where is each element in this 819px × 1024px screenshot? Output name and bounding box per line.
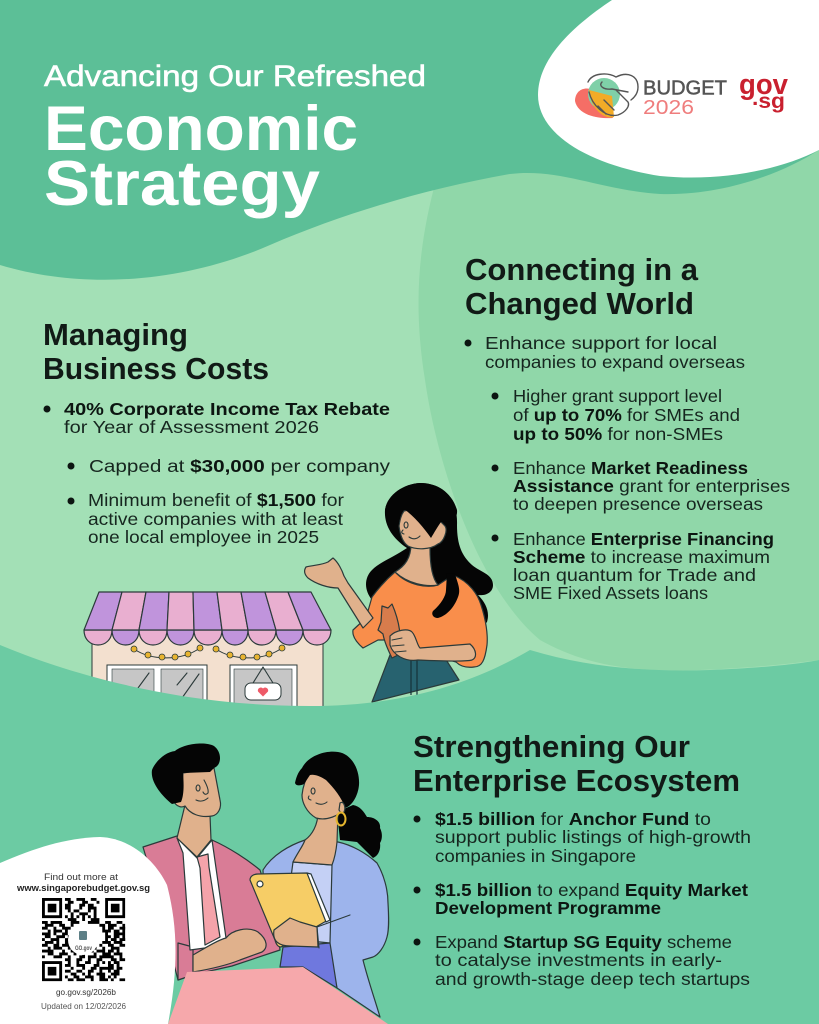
heading: managing business costs (43, 317, 269, 386)
white QR panel (0, 837, 175, 1024)
text block: strengthening our enterprise ecosystem: Expand Startup SG Equity scheme (435, 932, 732, 952)
text block: managing business costs: for Year of Assessment 2026 (64, 417, 319, 437)
panel: connecting in a changed world background (419, 140, 819, 670)
QR centre logo: GO.gov (75, 946, 93, 952)
woman neck and chest (293, 812, 338, 865)
woman face details (308, 788, 327, 804)
logo mark (575, 74, 638, 118)
woman ponytail (337, 805, 382, 858)
man shirt (177, 838, 227, 950)
hair front strand (432, 573, 459, 618)
wallet (378, 604, 400, 658)
tablet (250, 873, 328, 947)
QR code (42, 898, 128, 981)
raised arm and hand (305, 558, 373, 628)
text block: managing business costs: active companies with at least (88, 509, 343, 529)
face (399, 510, 446, 549)
text: go.gov.sg link: go.gov.sg/2026b (56, 987, 116, 997)
text block: connecting in a changed world: Scheme to increase maximum (513, 547, 770, 567)
text block: connecting in a changed world: Enhance Enterprise Financing (513, 529, 774, 549)
woman sleeve line (317, 915, 350, 948)
neck (395, 544, 438, 586)
text block: strengthening our enterprise ecosystem: support public listings of high-growth (435, 827, 751, 847)
man tie (197, 854, 220, 945)
man hair (152, 744, 220, 804)
title: Advancing Our Refreshed (44, 60, 426, 93)
logo: Budget 2026 (575, 69, 788, 119)
title: Economic (44, 94, 358, 164)
illustration: woman holding wallet (305, 483, 493, 702)
text block: strengthening our enterprise ecosystem: and growth-stage deep tech startups (435, 969, 750, 989)
woman ear (339, 802, 345, 813)
text block: strengthening our enterprise ecosystem: Development Programme (435, 898, 661, 918)
logo text gov.sg: gov (739, 69, 788, 101)
text block: connecting in a changed world: to deepen presence overseas (513, 494, 763, 514)
earring (336, 812, 346, 826)
woman face (302, 772, 345, 819)
text block: strengthening our enterprise ecosystem (414, 809, 751, 989)
panel: top green header (0, 0, 819, 280)
text: updated date: Updated on 12/02/2026 (41, 1002, 127, 1011)
woman hand on tablet (274, 918, 318, 947)
forearm and hand (390, 630, 476, 661)
woman skirt (280, 943, 337, 988)
woman cardigan (263, 840, 389, 1017)
text block: connecting in a changed world (464, 333, 790, 603)
logo text 2026: 2026 (643, 97, 694, 119)
text block: managing business costs: Minimum benefit of $1,500 for (88, 490, 344, 510)
hair back (366, 483, 493, 640)
illustration: man and woman at table (143, 744, 389, 1024)
text block: connecting in a changed world: Enhance Market Readiness (513, 458, 748, 478)
heading: strengthening our enterprise ecosystem: Enterprise Ecosystem (413, 763, 740, 798)
heading: connecting in a changed world: Connecting in a (465, 252, 699, 287)
heading: strengthening our enterprise ecosystem (413, 729, 740, 798)
text block: managing business costs (44, 399, 390, 547)
white logo blob (538, 0, 819, 178)
text block: managing business costs: Capped at $30,000 per company (89, 456, 390, 476)
text block: connecting in a changed world: Enhance support for local (485, 333, 717, 353)
face details (402, 522, 420, 539)
text: find out more: www.singaporebudget.gov.sg (16, 883, 150, 894)
text block: connecting in a changed world: Assistance grant for enterprises (513, 476, 790, 496)
text block: connecting in a changed world: Higher grant support level (513, 386, 722, 406)
man jacket (143, 836, 280, 980)
fringe (385, 483, 457, 538)
awning (84, 592, 331, 645)
illustration: shop front (84, 592, 331, 715)
text block: connecting in a changed world: SME Fixed Assets loans (513, 583, 708, 603)
table (168, 967, 388, 1024)
text block: managing business costs: one local employee in 2025 (88, 527, 319, 547)
logo text BUDGET: BUDGET (643, 78, 727, 100)
logo text gov.sg: sg (758, 90, 785, 113)
heading: connecting in a changed world: Changed World (465, 286, 694, 321)
text block: connecting in a changed world: loan quantum for Trade and (513, 565, 756, 585)
man face details (196, 780, 208, 801)
text block: connecting in a changed world: up to 50% for non-SMEs (513, 424, 723, 444)
text block: strengthening our enterprise ecosystem: $1.5 billion for Anchor Fund to (435, 809, 711, 829)
skirt (372, 655, 459, 702)
shop window left (107, 665, 207, 715)
clasped hands (193, 929, 266, 972)
title: Strategy (44, 149, 320, 219)
heading: strengthening our enterprise ecosystem: Strengthening Our (413, 729, 690, 764)
text block: managing business costs: 40% Corporate Income Tax Rebate (64, 399, 390, 419)
woman top (288, 862, 332, 943)
shop window right with heart sign (230, 665, 297, 715)
panel: bottom green background (0, 645, 819, 1024)
text: find out more: Find out more at (44, 872, 119, 882)
logo text gov.sg: . (752, 87, 758, 110)
title (44, 60, 426, 219)
heading: connecting in a changed world (465, 252, 699, 321)
orange top (353, 572, 487, 667)
heading: managing business costs: Managing (43, 317, 188, 352)
text block: connecting in a changed world: of up to 70% for SMEs and (513, 405, 740, 425)
text block: strengthening our enterprise ecosystem: $1.5 billion to expand Equity Market (435, 880, 748, 900)
string lights (131, 645, 285, 660)
man face (173, 768, 221, 817)
woman hair (295, 752, 359, 808)
text block: strengthening our enterprise ecosystem: to catalyse investments in early- (435, 950, 722, 970)
text block: strengthening our enterprise ecosystem: companies in Singapore (435, 846, 636, 866)
man neck (177, 805, 211, 857)
heading: managing business costs: Business Costs (43, 351, 269, 386)
QR centre logo (68, 925, 98, 955)
text block: connecting in a changed world: companies to expand overseas (485, 352, 745, 372)
text: find out more (16, 872, 150, 894)
